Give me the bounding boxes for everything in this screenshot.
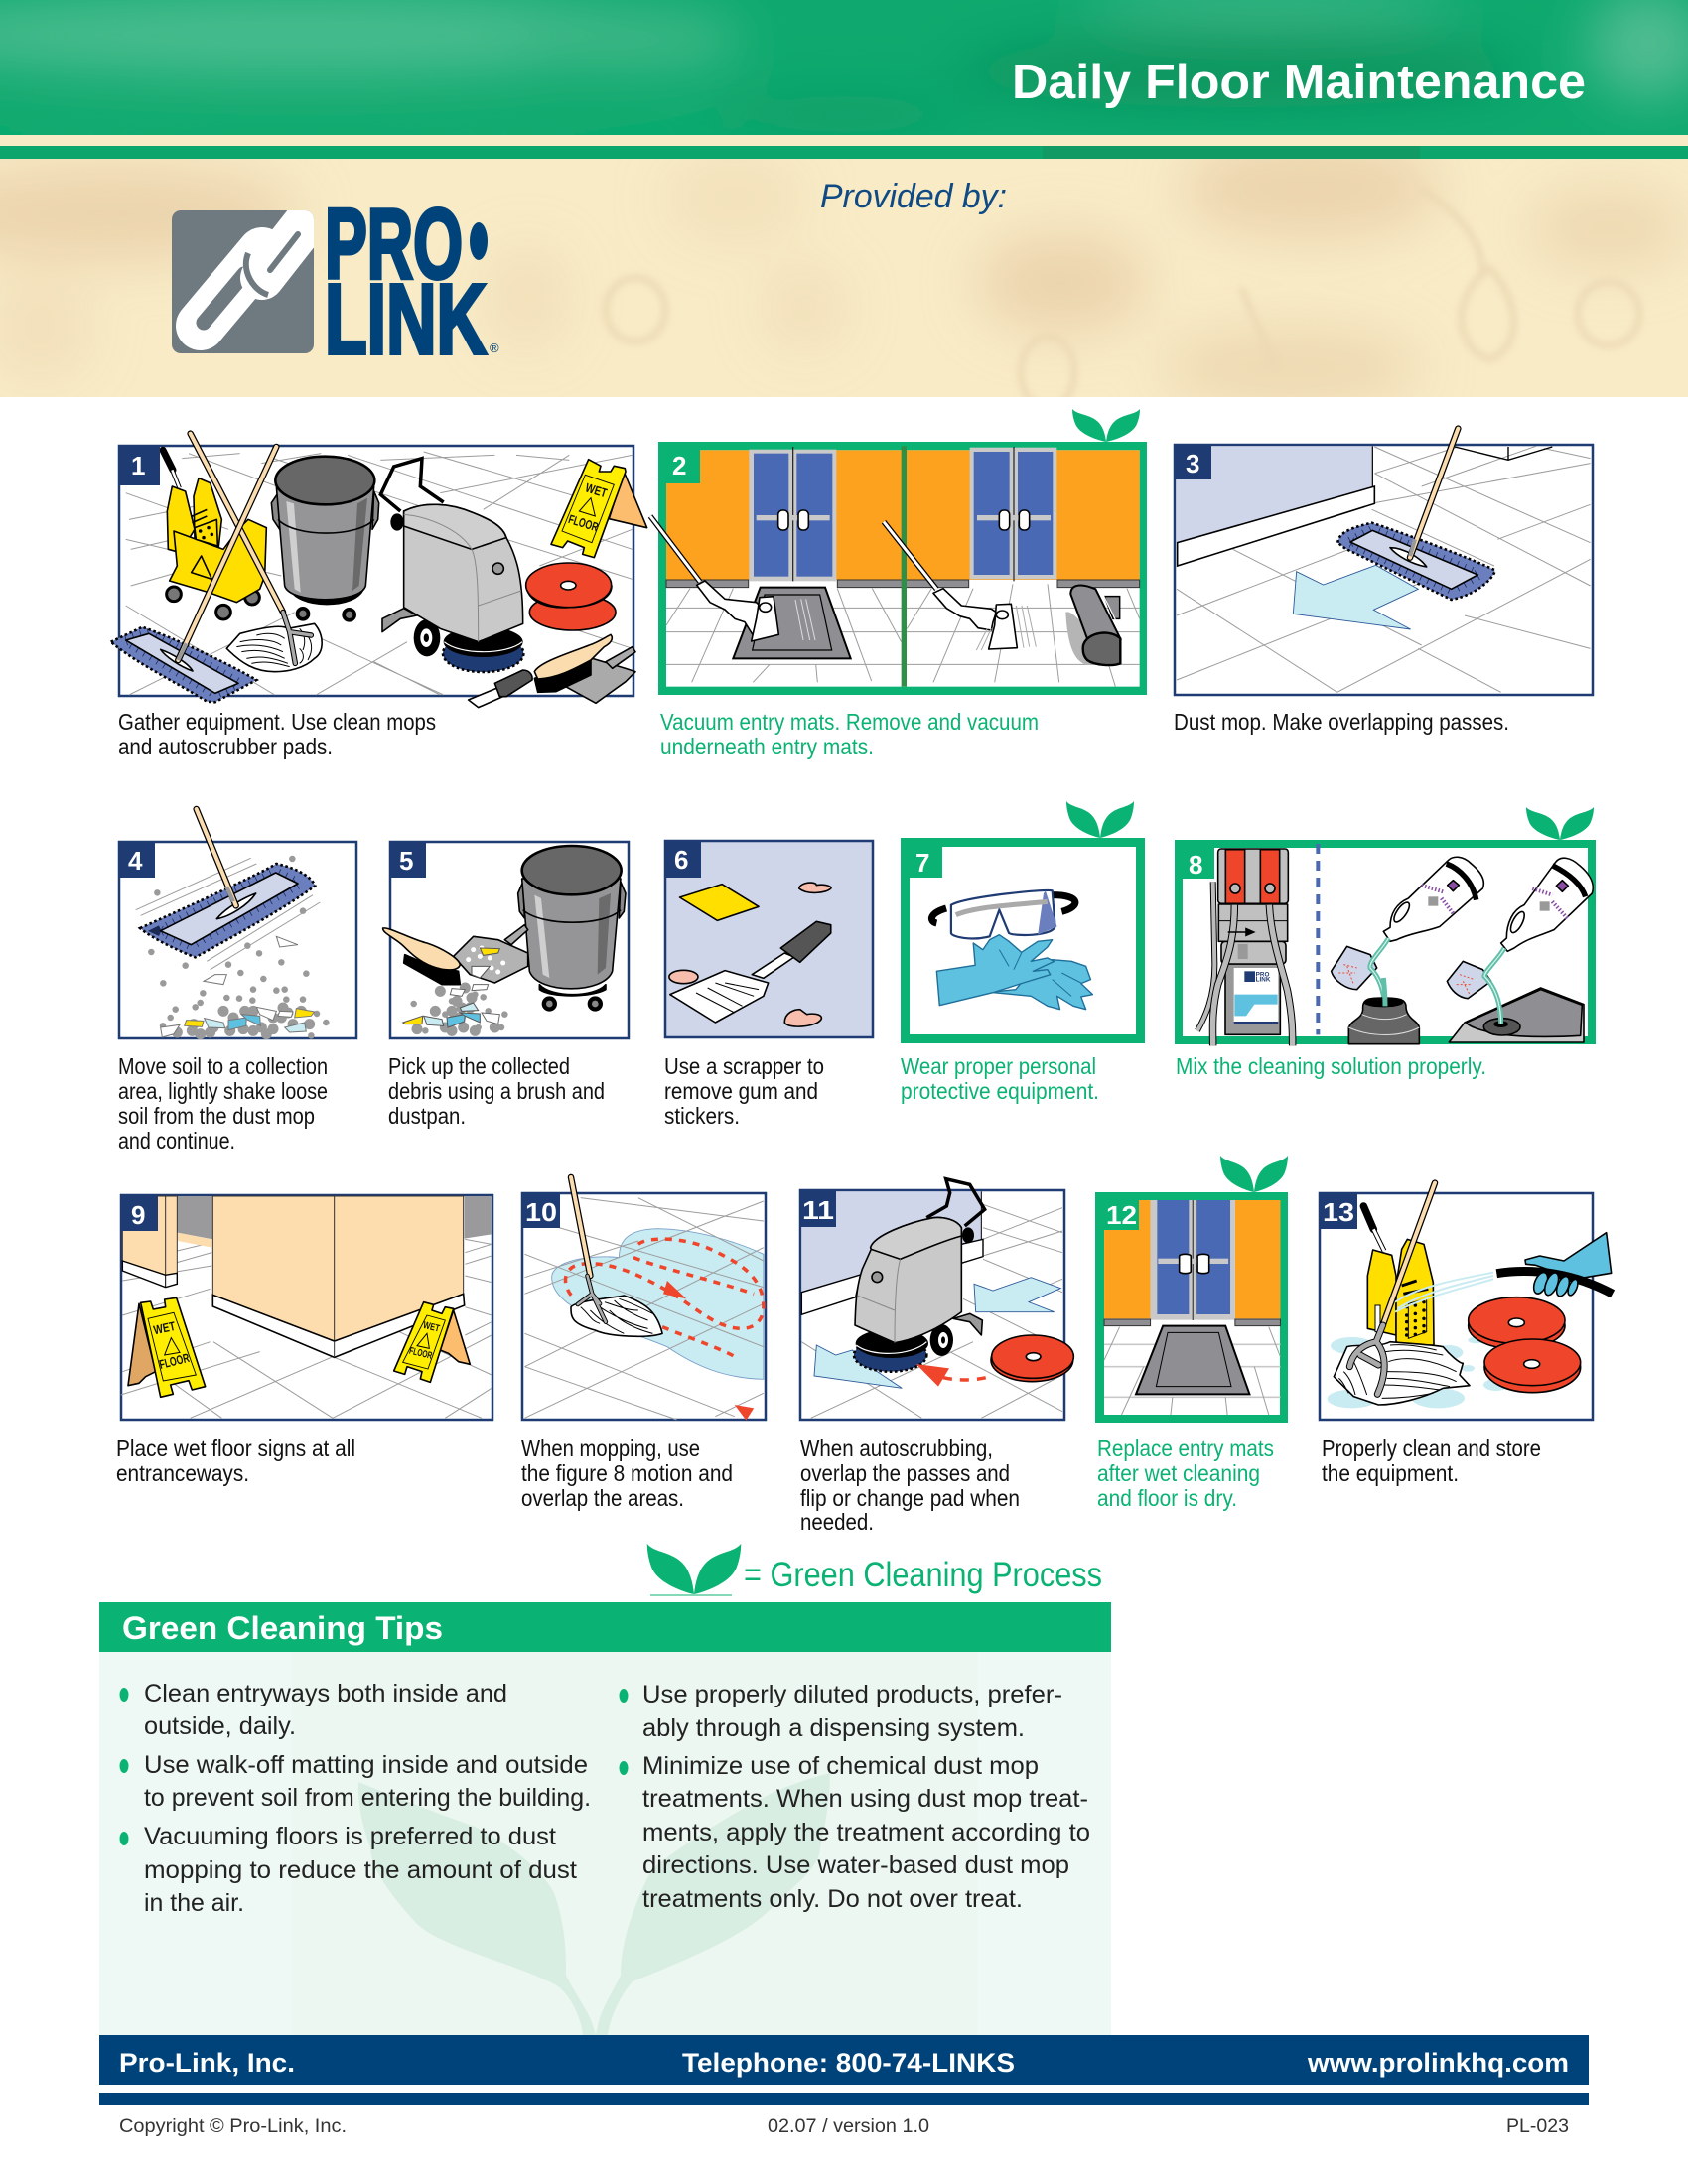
footer contact bar: Pro-Link, Inc.	[119, 2048, 295, 2078]
caption 10: the figure 8 motion and	[521, 1460, 733, 1486]
step number 9: 9	[131, 1200, 145, 1230]
panel 9: wet floor signs	[121, 1195, 492, 1420]
caption 11: needed.	[800, 1509, 874, 1535]
dispensing system: PRO	[1256, 971, 1269, 978]
floor grid 9	[121, 1239, 492, 1418]
legend: green cleaning process	[647, 1544, 1102, 1595]
caption 10: When mopping, use	[521, 1435, 700, 1461]
mop head	[191, 434, 322, 672]
arrow: direction of passes	[1293, 565, 1418, 629]
direction arrows	[814, 1278, 1060, 1388]
logo: Pro-Link: ®	[490, 341, 499, 355]
caption 11: flip or change pad when	[800, 1485, 1020, 1511]
caption 7: Wear proper personal	[901, 1053, 1096, 1079]
dispensing system	[1197, 849, 1293, 1045]
caption 13	[1322, 1435, 1541, 1486]
panel 8: mix cleaning solution	[1175, 807, 1596, 1045]
footer contact bar: www.prolinkhq.com	[1307, 2048, 1569, 2078]
rolled mat	[1065, 586, 1120, 665]
wringer 13	[1363, 1206, 1434, 1345]
debris pile 5	[403, 985, 504, 1030]
tips left column: Clean entryways both inside and	[144, 1680, 507, 1707]
step number 2: 2	[672, 451, 686, 480]
panel 1: gather equipment	[111, 434, 647, 708]
icon: green leaves 8	[1526, 807, 1594, 840]
wall 11	[801, 1191, 983, 1314]
step number 2	[666, 450, 700, 483]
logo: Pro-Link	[172, 189, 499, 375]
dust mop	[111, 447, 276, 702]
red floor pads	[526, 563, 616, 630]
footer small print: PL-023	[1506, 2116, 1569, 2137]
caption 8: Mix the cleaning solution properly.	[1176, 1053, 1486, 1079]
scraper tool	[670, 921, 831, 1023]
tips left column: Vacuuming floors is preferred to dust	[144, 1823, 556, 1850]
floor pads 13	[1469, 1297, 1581, 1393]
dust mop 3	[1337, 429, 1494, 600]
dust mop 4	[140, 809, 315, 957]
caption 7: protective equipment.	[901, 1078, 1099, 1104]
caption 3: Dust mop. Make overlapping passes.	[1174, 709, 1509, 735]
step number 3: 3	[1186, 449, 1199, 478]
step number 4	[119, 842, 155, 878]
logo: Pro-Link: PRO	[325, 189, 463, 300]
mop bucket and wringer	[163, 450, 266, 619]
right bottle and measuring cup	[1447, 858, 1593, 999]
caption 4: and continue.	[118, 1128, 235, 1154]
caption 13: the equipment.	[1322, 1460, 1459, 1486]
dashed divider	[1316, 844, 1320, 1034]
tips heading bar: Green Cleaning Tips	[122, 1610, 443, 1646]
step number 7	[910, 847, 942, 878]
caption 1: and autoscrubber pads.	[118, 734, 333, 759]
icon: green leaves 12	[1220, 1156, 1288, 1192]
tips left column: in the air.	[144, 1889, 244, 1917]
wall and doors 12	[1104, 1200, 1280, 1326]
sink	[1449, 948, 1584, 1042]
tips right column: ably through a dispensing system.	[642, 1714, 1025, 1742]
tips heading bar	[99, 1602, 1111, 1652]
spray from hose	[1395, 1273, 1493, 1312]
caption 4	[118, 1053, 328, 1154]
step number 8: 8	[1189, 850, 1202, 880]
sweep lines 4	[136, 858, 320, 970]
tips right column: Minimize use of chemical dust mop	[642, 1752, 1039, 1780]
footer small print: Copyright © Pro-Link, Inc.	[119, 2116, 347, 2137]
footer contact bar	[99, 2035, 1589, 2085]
step number 9	[121, 1195, 158, 1231]
entry mat	[733, 588, 851, 658]
caption 2: underneath entry mats.	[660, 734, 874, 759]
step number 13	[1320, 1193, 1357, 1229]
tips left column: to prevent soil from entering the building.	[144, 1784, 591, 1812]
caption 5: Pick up the collected	[388, 1053, 570, 1079]
panel 7: protective equipment	[901, 801, 1145, 1043]
divider	[902, 446, 907, 687]
wet floor sign left: WET	[152, 1319, 177, 1337]
caption 1: Gather equipment. Use clean mops	[118, 709, 436, 735]
wet floor sign left	[128, 1297, 206, 1397]
caption 7	[901, 1053, 1099, 1104]
caption 6: remove gum and	[664, 1078, 818, 1104]
step number 5	[390, 842, 426, 878]
caption 10	[521, 1435, 733, 1511]
step number 12: 12	[1106, 1200, 1137, 1230]
step number 11	[800, 1190, 836, 1227]
tips right column: treatments. When using dust mop treat-	[642, 1785, 1088, 1813]
caption 11	[800, 1435, 1020, 1535]
caption 9: entranceways.	[116, 1460, 249, 1486]
mop 13	[1334, 1183, 1470, 1405]
step number 1	[119, 446, 160, 485]
caption 6: Use a scrapper to	[664, 1053, 824, 1079]
gloves	[936, 935, 1092, 1010]
caption 12: Replace entry mats	[1097, 1435, 1274, 1461]
tips left column: outside, daily.	[144, 1712, 296, 1740]
entry mat 12	[1136, 1326, 1249, 1394]
title: Daily Floor Maintenance	[1012, 56, 1586, 109]
water puddles	[1328, 1337, 1508, 1408]
floor grid 3	[1177, 427, 1591, 692]
icon: green leaves 7	[1066, 801, 1134, 838]
footer rule	[99, 2093, 1589, 2105]
panel 2: vacuum entry mats	[650, 409, 1147, 695]
footer contact bar: Telephone: 800-74-LINKS	[682, 2048, 1015, 2078]
step number 7: 7	[915, 848, 929, 878]
panel: green cleaning tips	[99, 1602, 1111, 2035]
trash barrel	[271, 457, 379, 622]
caption 4: area, lightly shake loose	[118, 1078, 328, 1104]
caption 1	[118, 709, 436, 759]
caption 4: Move soil to a collection	[118, 1053, 328, 1079]
wet floor sign: FLOOR	[567, 512, 600, 535]
water on floor	[552, 1229, 764, 1379]
red figure 8 path	[565, 1239, 764, 1421]
step number 10: 10	[525, 1197, 557, 1227]
panel 6: scraper	[665, 841, 873, 1037]
vacuum right and bare floor	[884, 522, 1036, 650]
panel 11: autoscrubbing	[800, 1179, 1073, 1420]
watermark leaves	[292, 1652, 978, 2035]
left bottle and measuring cup	[1332, 857, 1483, 1006]
floor lines 12	[1104, 1344, 1280, 1397]
header band: cream background with water photo	[0, 159, 1688, 397]
wet floor sign right	[394, 1302, 470, 1382]
debris pile 4	[151, 859, 326, 1037]
tips right column: treatments only. Do not over treat.	[642, 1885, 1023, 1913]
wet floor sign right: WET	[422, 1320, 441, 1335]
step number 5: 5	[399, 846, 413, 876]
tips right column: ments, apply the treatment according to	[642, 1819, 1090, 1846]
doors left	[749, 447, 836, 581]
step number 13: 13	[1323, 1197, 1354, 1227]
container	[1348, 978, 1419, 1044]
trash barrel 5	[518, 846, 626, 1012]
tips left column	[119, 1680, 591, 1917]
caption 6	[664, 1053, 824, 1129]
caption 12	[1097, 1435, 1274, 1511]
caption 9	[116, 1435, 355, 1486]
floor and walls 2	[666, 450, 1140, 687]
caption 13: Properly clean and store	[1322, 1435, 1541, 1461]
vacuum left	[650, 516, 778, 641]
panel 3: dust mop	[1175, 427, 1593, 695]
caption 11: overlap the passes and	[800, 1460, 1010, 1486]
panel 13: clean and store	[1320, 1183, 1613, 1420]
caption 2	[660, 709, 1039, 759]
step number 3	[1175, 445, 1211, 479]
wet floor sign: WET	[584, 480, 609, 500]
autoscrubber 11	[854, 1179, 985, 1372]
panel 12: replace entry mats	[1095, 1156, 1288, 1423]
logo: Pro-Link: LINK	[325, 264, 487, 375]
header band: green title background	[0, 0, 1688, 135]
caption 5: dustpan.	[388, 1103, 466, 1129]
floor grid 1	[126, 452, 633, 695]
panel 4: move soil	[119, 809, 356, 1038]
step number 6: 6	[674, 845, 688, 875]
wet floor sign left: FLOOR	[158, 1351, 191, 1372]
floor grid 10	[524, 1198, 764, 1420]
goggles	[931, 890, 1075, 938]
footer small print: 02.07 / version 1.0	[768, 2116, 929, 2137]
step number 11: 11	[802, 1195, 834, 1225]
gum spots	[669, 883, 831, 1026]
caption 6: stickers.	[664, 1103, 740, 1129]
header band: cream and green stripes	[0, 135, 1688, 159]
caption 12: after wet cleaning	[1097, 1460, 1260, 1486]
dustpan 5	[454, 925, 528, 983]
floor grid 11	[801, 1204, 1062, 1418]
sticker	[680, 885, 759, 920]
caption 12: and floor is dry.	[1097, 1485, 1237, 1511]
step number 10	[522, 1193, 560, 1228]
footer small print	[119, 2116, 1569, 2137]
icon: green leaves 2	[1072, 409, 1140, 442]
step number 6	[665, 841, 701, 878]
step number 1: 1	[131, 451, 145, 480]
dispensing system: LINK	[1256, 977, 1271, 984]
pad and red arrow	[916, 1335, 1073, 1387]
tips right column	[620, 1681, 1090, 1913]
panel 10: mopping figure 8	[522, 1177, 766, 1421]
caption 5	[388, 1053, 605, 1129]
wall 3	[1176, 446, 1552, 566]
caption 11: When autoscrubbing,	[800, 1435, 993, 1461]
provided by label: Provided by:	[820, 178, 1007, 215]
gloved hand and hose	[1496, 1233, 1613, 1298]
autoscrubber machine	[380, 459, 523, 672]
tips right column: directions. Use water-based dust mop	[642, 1851, 1069, 1879]
wet floor sign right: FLOOR	[408, 1346, 433, 1362]
caption 10: overlap the areas.	[521, 1485, 684, 1511]
caption 4: soil from the dust mop	[118, 1103, 315, 1129]
tips right column: Use properly diluted products, prefer-	[642, 1681, 1062, 1708]
doors right	[970, 447, 1056, 581]
brush 5	[383, 928, 460, 985]
caption 9: Place wet floor signs at all	[116, 1435, 355, 1461]
legend: green cleaning process: = Green Cleaning Process	[744, 1556, 1102, 1594]
dustpan, brush and scraper	[469, 634, 635, 708]
tips left column: mopping to reduce the amount of dust	[144, 1856, 577, 1884]
tips left column: Use walk-off matting inside and outside	[144, 1751, 588, 1779]
panel 5: pick up debris	[383, 842, 629, 1038]
walls and baseboards	[122, 1196, 492, 1357]
mop 10	[571, 1177, 662, 1336]
wet floor sign	[551, 460, 647, 558]
step number 8	[1183, 848, 1214, 880]
step number 4: 4	[128, 846, 143, 876]
caption 2: Vacuum entry mats. Remove and vacuum	[660, 709, 1039, 735]
caption 5: debris using a brush and	[388, 1078, 605, 1104]
